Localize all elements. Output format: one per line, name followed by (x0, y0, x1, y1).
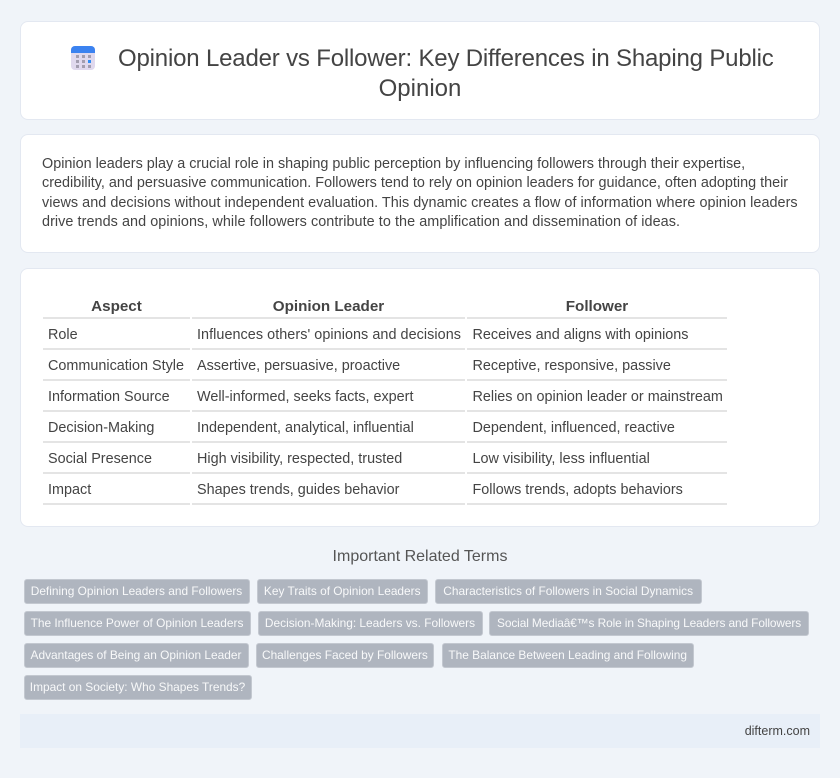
footer band (20, 714, 820, 748)
icon: calendar (71, 46, 95, 70)
panel: comparison table (20, 268, 820, 527)
row: Social Presence: High visibility, respected, trusted (197, 451, 402, 467)
row: Social Presence: Low visibility, less influential (472, 451, 650, 467)
title (118, 45, 774, 102)
row: Role (48, 327, 688, 343)
row: Information Source: Well-informed, seeks facts, expert (197, 389, 413, 405)
tag (258, 611, 482, 636)
row: Decision-Making: Dependent, influenced, reactive (472, 420, 675, 436)
tag (489, 611, 809, 636)
tag (24, 579, 250, 604)
header: Follower: Follower (566, 298, 628, 315)
text: intro paragraph (42, 156, 798, 230)
row: Communication Style: Assertive, persuasive, proactive (197, 358, 400, 374)
panel: header (20, 21, 820, 120)
tag: Key Traits of Opinion Leaders (264, 584, 421, 598)
tag: Characteristics of Followers in Social Dynamics (443, 584, 693, 598)
header: Opinion Leader: Opinion Leader (273, 298, 384, 315)
heading: Important Related Terms: Important Related Terms (333, 548, 507, 565)
row: Social Presence (48, 451, 650, 467)
header: Aspect: Aspect (91, 298, 142, 315)
footer text: difterm.com (745, 724, 810, 738)
table: comparison (43, 298, 727, 505)
text: intro paragraph: credibility, and persuasive communication. Followers tend to rely on opinion leaders for guidance, often adopting their (42, 175, 788, 191)
tag (435, 579, 702, 604)
row: Decision-Making: Independent, analytical, influential (197, 420, 414, 436)
title: Opinion (379, 75, 461, 102)
row: Role: Influences others' opinions and decisions (197, 327, 461, 343)
text: intro paragraph: views and decisions without independent evaluation. This dynamic creates a flow of information where opinion leaders (42, 195, 798, 211)
row: Decision-Making: Decision-Making (48, 420, 154, 436)
tag: Challenges Faced by Followers (262, 648, 428, 662)
row: Impact (48, 482, 683, 498)
row: Information Source (48, 389, 723, 405)
tag (442, 643, 694, 668)
tag (24, 675, 252, 700)
panel: intro paragraph (20, 134, 820, 253)
tag (256, 643, 434, 668)
tag: Social Mediaâ€™s Role in Shaping Leaders and Followers (497, 616, 801, 630)
tag group: related terms (24, 579, 809, 700)
title: Opinion Leader vs Follower: Key Differences in Shaping Public (118, 45, 774, 72)
row: Impact: Shapes trends, guides behavior (197, 482, 399, 498)
tag (24, 643, 248, 668)
row: Decision-Making (48, 420, 675, 436)
tag: Impact on Society: Who Shapes Trends? (30, 680, 245, 694)
row: Role: Role (48, 327, 78, 343)
row: Communication Style: Receptive, responsive, passive (472, 358, 671, 374)
row: Role: Receives and aligns with opinions (472, 327, 688, 343)
tag: Decision-Making: Leaders vs. Followers (265, 616, 475, 630)
row: Impact: Follows trends, adopts behaviors (472, 482, 683, 498)
row: Impact: Impact (48, 482, 91, 498)
tag (24, 611, 250, 636)
tag: The Influence Power of Opinion Leaders (31, 616, 243, 630)
row: Communication Style: Communication Style (48, 358, 184, 374)
row: Information Source: Relies on opinion leader or mainstream (472, 389, 723, 405)
tag: Advantages of Being an Opinion Leader (31, 648, 241, 662)
row: Communication Style (48, 358, 671, 374)
text: intro paragraph: drive trends and opinions, while followers contribute to the amplification and dissemination of ideas. (42, 214, 680, 230)
row: Social Presence: Social Presence (48, 451, 152, 467)
tag: The Balance Between Leading and Following (448, 648, 687, 662)
text: intro paragraph: Opinion leaders play a crucial role in shaping public perception by influencing followers through their expertise, (42, 156, 745, 172)
tag: Defining Opinion Leaders and Followers (31, 584, 242, 598)
row: Information Source: Information Source (48, 389, 170, 405)
tag (256, 579, 428, 604)
